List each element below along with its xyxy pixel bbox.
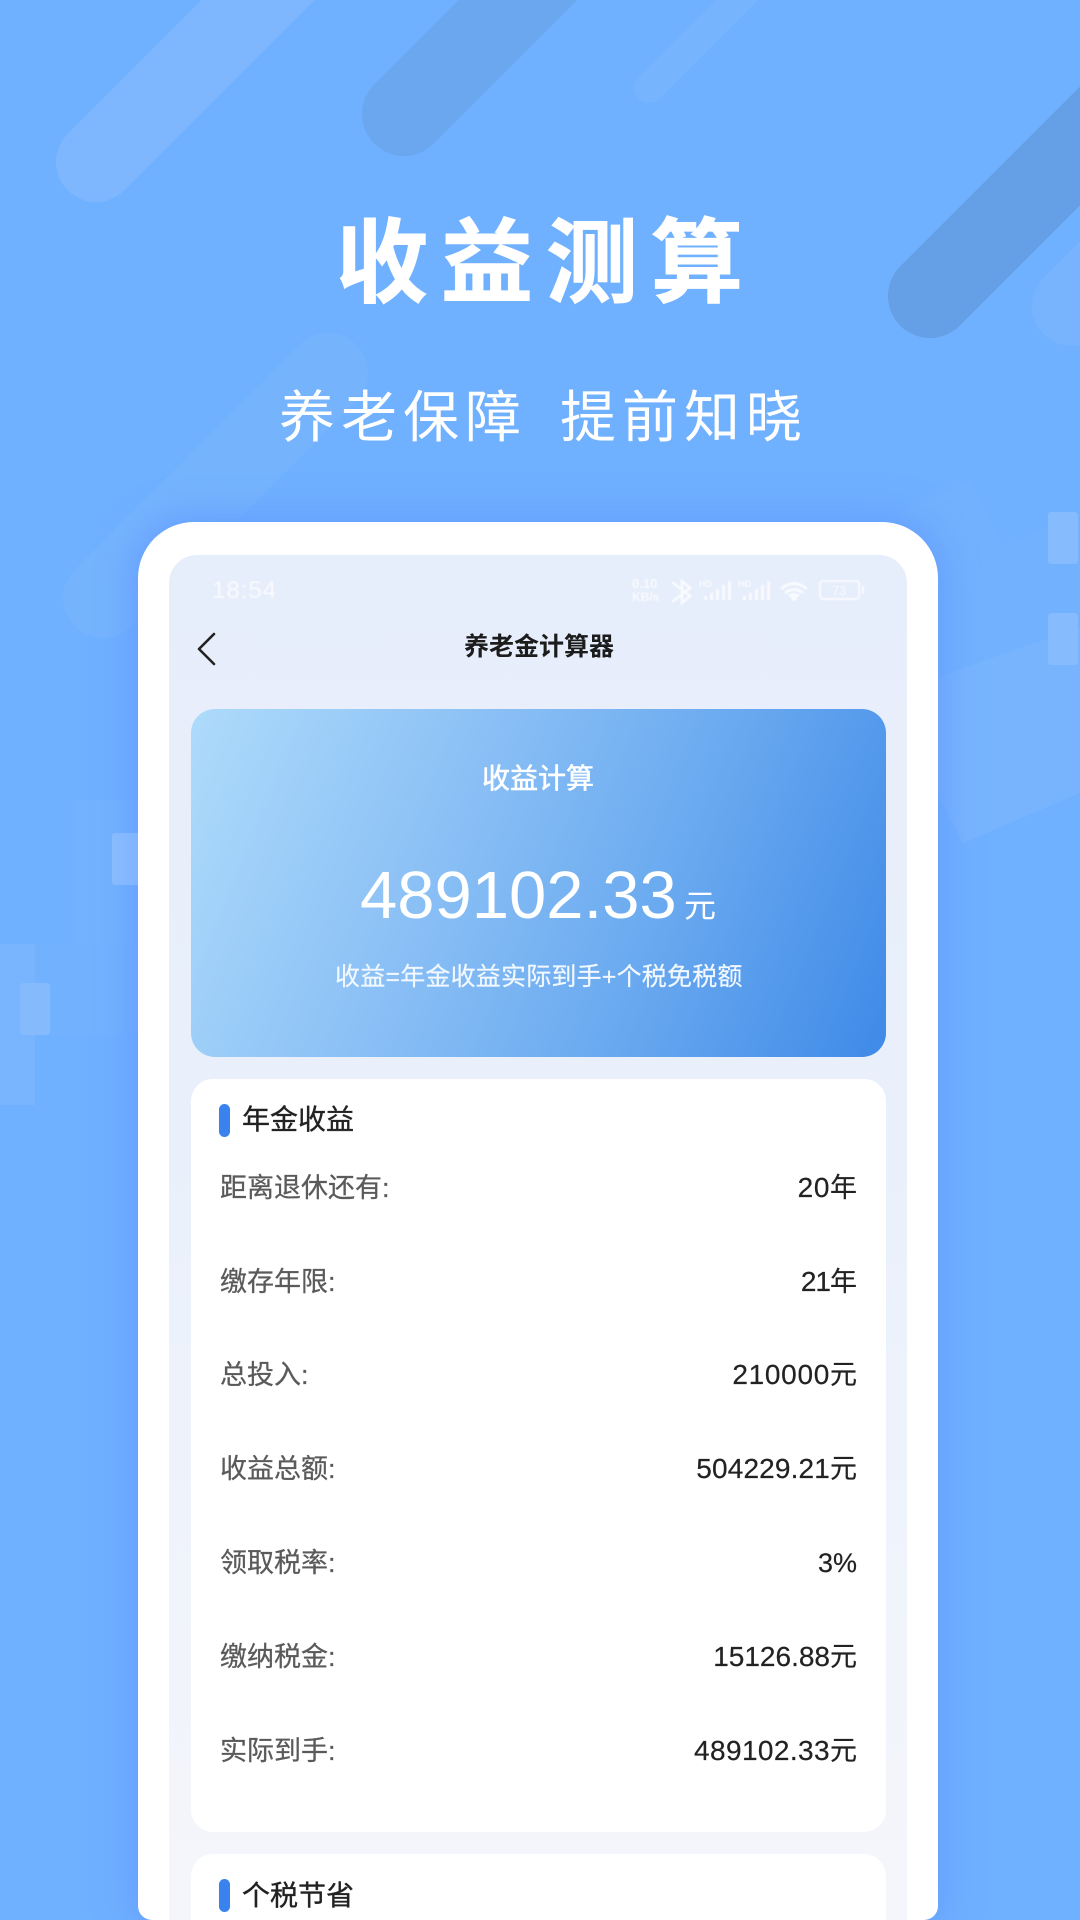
small background square beside frame xyxy=(112,833,138,885)
icon: back arrow xyxy=(198,632,216,666)
row: contribution years: 缴存年限: xyxy=(220,1267,336,1297)
row: contribution years: 21年 xyxy=(801,1266,857,1297)
status bar icons: HD xyxy=(699,579,712,589)
earnings amount: 489102.33 xyxy=(360,858,677,933)
section accent bar xyxy=(219,1104,230,1137)
status bar icons: 0.10 xyxy=(632,576,657,591)
amount unit: 元 xyxy=(684,888,716,924)
status bar time: 18:54 xyxy=(212,577,277,604)
section accent bar xyxy=(219,1879,230,1912)
row: total earnings xyxy=(220,1453,857,1484)
row: net received xyxy=(220,1735,857,1766)
row: years to retirement xyxy=(220,1172,857,1203)
status bar icons: 73 xyxy=(832,583,846,598)
row: tax paid: 15126.88元 xyxy=(713,1641,857,1672)
row: tax rate: 领取税率: xyxy=(220,1548,336,1578)
phone screen xyxy=(169,555,907,1920)
row: contribution years xyxy=(220,1266,857,1297)
row: total input xyxy=(220,1359,857,1390)
row: total input: 总投入: xyxy=(220,1360,309,1390)
status bar icons xyxy=(632,576,864,605)
subtitle second part: 提前知晓 xyxy=(560,386,808,449)
status bar icons: KB/s xyxy=(632,590,660,604)
phone frame xyxy=(138,522,938,1920)
card heading: 收益计算 xyxy=(482,763,594,794)
row: years to retirement: 距离退休还有: xyxy=(220,1173,390,1203)
panel: annuity earnings xyxy=(191,1079,886,1832)
section heading: tax savings: 个税节省 xyxy=(242,1880,354,1911)
formula note: 收益=年金收益实际到手+个税免税额 xyxy=(335,963,743,991)
row: years to retirement: 20年 xyxy=(798,1172,857,1203)
row: total input: 210000元 xyxy=(732,1359,857,1390)
title: 收益测算 xyxy=(336,213,756,315)
status bar icons: HD xyxy=(738,579,751,589)
row: tax paid: 缴纳税金: xyxy=(220,1642,336,1672)
row: net received: 实际到手: xyxy=(220,1736,336,1766)
row: tax rate xyxy=(220,1548,857,1578)
screen title: 养老金计算器 xyxy=(464,633,614,661)
row: net received: 489102.33元 xyxy=(694,1735,857,1766)
section heading: annuity earnings: 年金收益 xyxy=(242,1104,354,1135)
panel: tax savings xyxy=(191,1854,886,1920)
panel: earnings result card xyxy=(191,709,886,1057)
row: tax rate: 3% xyxy=(818,1548,857,1578)
row: total earnings: 504229.21元 xyxy=(696,1453,857,1484)
row: tax paid xyxy=(220,1641,857,1672)
row: total earnings: 收益总额: xyxy=(220,1454,336,1484)
subtitle: 养老保障 xyxy=(279,386,527,449)
